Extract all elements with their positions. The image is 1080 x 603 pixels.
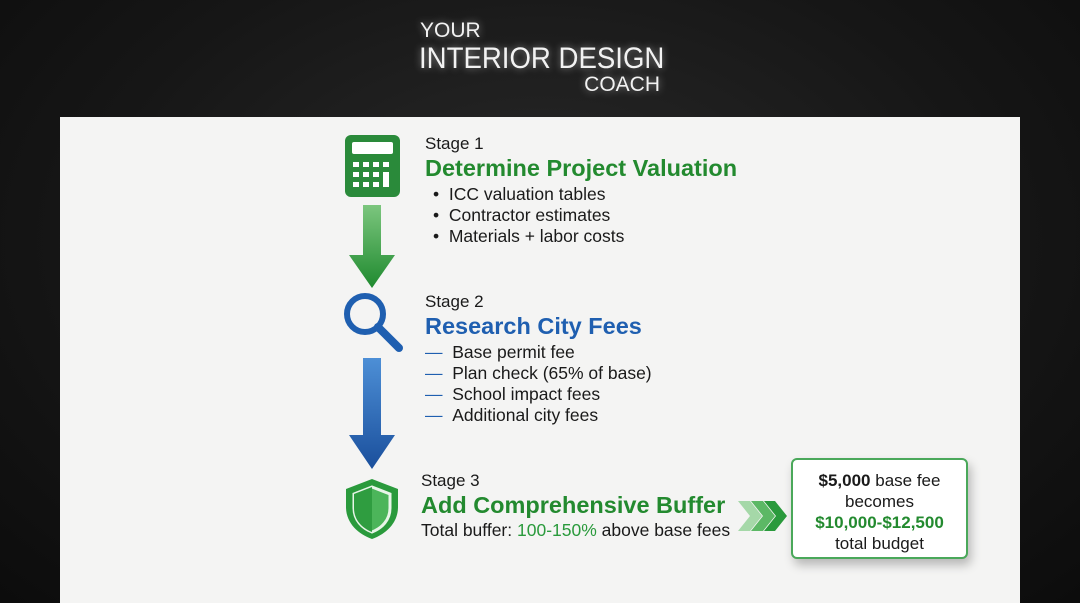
text: stage 2: Stage 2 bbox=[425, 292, 484, 311]
text: stage 1: Determine Project Valuation bbox=[425, 155, 737, 181]
text: stage 3: Total buffer: 100-150% above base fees bbox=[421, 520, 730, 540]
title: YOUR bbox=[420, 19, 481, 42]
callout: budget: $5,000 base fee bbox=[819, 471, 940, 490]
panel: stages bbox=[60, 117, 1020, 603]
text: stage 1 bbox=[425, 134, 737, 246]
icon: calculator bbox=[345, 135, 400, 197]
callout: budget: $10,000-$12,500 bbox=[815, 513, 944, 532]
title: INTERIOR DESIGN bbox=[419, 42, 664, 75]
text: stage 1: • Contractor estimates bbox=[433, 205, 610, 225]
text: stage 2 bbox=[425, 292, 652, 425]
icon: shield bbox=[346, 479, 398, 539]
icon: magnifier bbox=[344, 293, 403, 352]
text: stage 3 bbox=[421, 471, 730, 540]
arrow: blue down bbox=[349, 358, 395, 469]
text: stage 2: — School impact fees bbox=[425, 384, 600, 404]
text: stage 3: Stage 3 bbox=[421, 471, 480, 490]
text: stage 2: — Base permit fee bbox=[425, 342, 575, 362]
text: stage 2: — Additional city fees bbox=[425, 405, 598, 425]
text: stage 3: Add Comprehensive Buffer bbox=[421, 492, 725, 518]
callout: budget: total budget bbox=[835, 534, 924, 553]
arrow: green down bbox=[349, 205, 395, 288]
text: stage 2: Research City Fees bbox=[425, 313, 642, 339]
icon: chevrons bbox=[738, 501, 787, 531]
callout: budget bbox=[791, 458, 968, 559]
text: stage 1: • ICC valuation tables bbox=[433, 184, 605, 204]
text: stage 2: — Plan check (65% of base) bbox=[425, 363, 652, 383]
text: stage 1: Stage 1 bbox=[425, 134, 484, 153]
title bbox=[417, 18, 667, 96]
callout: budget: becomes bbox=[845, 492, 914, 511]
title: COACH bbox=[584, 73, 660, 96]
text: stage 1: • Materials + labor costs bbox=[433, 226, 624, 246]
